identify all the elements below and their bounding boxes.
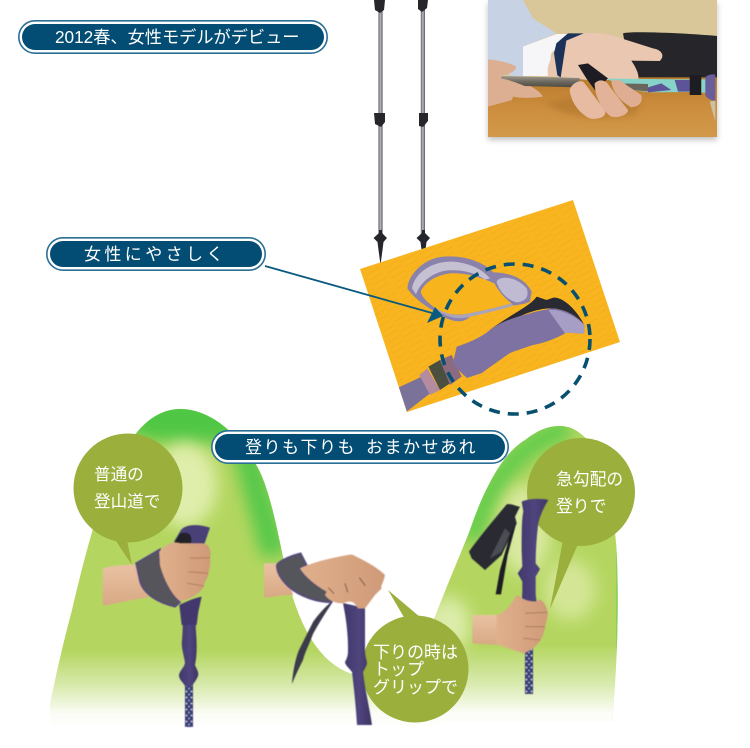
pill heading: up and down bbox=[212, 431, 508, 463]
pill heading: women's model debut: 2012春、女性モデルがデビュー bbox=[55, 27, 300, 47]
trekking poles bbox=[374, 0, 430, 265]
speech bubble: top grip on descent: 下りの時は bbox=[373, 643, 458, 662]
arrow from pill to grip bbox=[265, 266, 443, 323]
grip and loop detail bbox=[407, 256, 584, 378]
pill heading: up and down: 登りも下りも bbox=[245, 438, 356, 457]
pill heading: gentle for women: 女性にやさしく bbox=[84, 245, 227, 264]
right green mountain bbox=[434, 426, 618, 722]
speech bubble: ordinary trail: 普通の bbox=[94, 465, 144, 484]
right pole: hand on lower grip with strap bbox=[469, 499, 548, 694]
pill heading: women's model debut bbox=[19, 21, 327, 53]
speech bubble: top grip on descent: トップ bbox=[373, 660, 424, 679]
photo: hand holding pole bbox=[488, 0, 718, 141]
middle pole: hand on top grip bbox=[264, 553, 385, 725]
dashed highlight circle bbox=[440, 264, 590, 414]
speech bubble: ordinary trail bbox=[74, 434, 182, 565]
speech bubble: steep climb: 登りで bbox=[556, 497, 606, 516]
speech bubble: ordinary trail: 登山道で bbox=[94, 492, 160, 511]
speech bubble: steep climb: 急勾配の bbox=[556, 470, 623, 489]
photo: grip and wrist strap on orange board bbox=[360, 200, 620, 412]
left green mountain bbox=[50, 409, 386, 714]
speech bubble: steep climb bbox=[527, 438, 635, 609]
speech bubble: top grip on descent: グリップで bbox=[373, 678, 458, 697]
collar of pole bbox=[397, 355, 462, 412]
left pole: hand with strap bbox=[103, 525, 211, 727]
speech bubble: top grip on descent bbox=[362, 590, 468, 722]
pill heading: up and down: おまかせあれ bbox=[366, 438, 477, 457]
pill heading: gentle for women bbox=[47, 238, 265, 270]
